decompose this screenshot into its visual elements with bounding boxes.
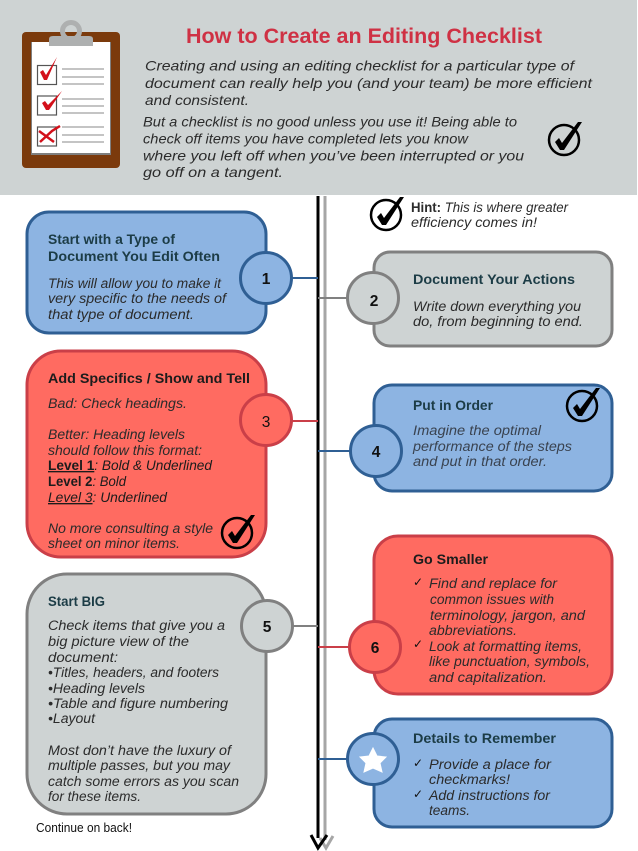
panel: step 4: Put in Order (413, 397, 494, 413)
panel: step 3: Bad: Check headings. (48, 396, 187, 411)
panel: step 6: ✓ (413, 637, 423, 651)
panel: step 3: Level 2: Bold (48, 474, 126, 489)
panel: step 4: performance of the steps (412, 439, 572, 454)
icon: clipboard (22, 22, 120, 168)
panel: step 6: terminology, jargon, and (430, 608, 586, 623)
second paragraph (143, 114, 524, 180)
panel: step 5: Start BIG (48, 593, 105, 609)
panel: step 1: Start with a Type of (48, 231, 175, 247)
panel: step 2: Document Your Actions (413, 271, 575, 287)
panel: step 2: 2 (370, 293, 378, 310)
panel: step 1: very specific to the needs of (48, 291, 227, 306)
panel: step 2: Write down everything you (413, 299, 582, 314)
panel: step 1 (27, 212, 292, 333)
panel: step 5: document: (48, 650, 118, 665)
panel: step 3 (27, 351, 292, 557)
footer note: Continue on back! (36, 821, 132, 835)
panel: step 4: 4 (372, 444, 381, 461)
panel: step 6: ✓ (413, 575, 423, 589)
panel: details to remember: Details to Remember (413, 730, 557, 746)
panel: step 3: Add Specifics / Show and Tell (48, 370, 250, 386)
panel: details to remember (348, 719, 612, 827)
panel: step 3: should follow this format: (48, 443, 202, 458)
second paragraph: where you left off when you’ve been interrupted or you (143, 148, 524, 164)
hint (371, 197, 568, 230)
intro paragraph: and consistent. (145, 92, 249, 108)
panel: step 1: that type of document. (48, 307, 194, 322)
icon: header check (549, 122, 582, 155)
panel: step 5: 5 (263, 619, 272, 636)
panel: step 5: Most don’t have the luxury of (48, 743, 232, 758)
panel: details to remember: ✓ (413, 756, 423, 770)
intro paragraph (145, 58, 593, 108)
panel: step 5: •Titles, headers, and footers (48, 665, 219, 680)
panel: step 5 (27, 574, 292, 814)
panel: step 3: 3 (262, 414, 270, 431)
panel: details to remember: checkmarks! (429, 772, 510, 787)
panel: step 2 (348, 252, 612, 346)
panel: step 2: do, from beginning to end. (413, 314, 583, 329)
panel: step 6: Go Smaller (413, 551, 489, 567)
hint: Hint: This is where greater (411, 200, 568, 215)
timeline lines (311, 196, 333, 848)
panel: step 6: abbreviations. (429, 623, 517, 638)
panel: step 3: Level 3: Underlined (48, 490, 167, 505)
intro paragraph: Creating and using an editing checklist for a particular type of (145, 58, 576, 74)
header band (0, 0, 637, 195)
panel: step 1: This will allow you to make it (48, 276, 222, 291)
panel: step 6: Find and replace for (429, 576, 558, 591)
panel: step 1: 1 (262, 271, 271, 288)
panel: step 6: like punctuation, symbols, (429, 654, 590, 669)
panel: step 5: •Layout (48, 711, 96, 726)
panel: details to remember: ✓ (413, 787, 423, 801)
panel: details to remember: Provide a place for (429, 757, 552, 772)
panel: step 5: •Table and figure numbering (48, 696, 229, 711)
icon: check in step 4 (567, 388, 600, 421)
panel: step 5: big picture view of the (48, 634, 189, 649)
panel: step 4 (350, 385, 612, 491)
panel: step 5: Check items that give you a (48, 618, 226, 633)
panel: step 5: catch some errors as you scan (48, 774, 239, 789)
panel: details to remember: Add instructions for (428, 788, 551, 803)
panel: step 6: common issues with (430, 592, 554, 607)
panel: details to remember: teams. (429, 803, 470, 818)
panel: step 1: Document You Edit Often (48, 248, 220, 264)
second paragraph: But a checklist is no good unless you use it! Being able to (143, 114, 517, 130)
panel: step 6: Look at formatting items, (429, 639, 582, 654)
panel: step 4: and put in that order. (413, 454, 547, 469)
panel: step 4: Imagine the optimal (413, 423, 542, 438)
intro paragraph: document can really help you (and your team) be more efficient (145, 75, 593, 91)
panel: step 5: •Heading levels (48, 681, 145, 696)
panel: step 3: Better: Heading levels (48, 427, 185, 442)
panel: step 6 (350, 536, 612, 694)
second paragraph: go off on a tangent. (143, 164, 283, 180)
second paragraph: check off items you have completed lets you know (143, 130, 469, 146)
icon: check in step 3 (222, 515, 255, 548)
panel: step 3: No more consulting a style (48, 521, 213, 536)
panel: step 3: Level 1: Bold & Underlined (48, 458, 212, 473)
panel: step 6: 6 (371, 640, 380, 657)
panel: step 6: and capitalization. (429, 670, 547, 685)
panel: step 5: multiple passes, but you may (48, 758, 231, 773)
title: How to Create an Editing Checklist (186, 25, 542, 48)
hint: efficiency comes in! (411, 215, 537, 230)
connectors (292, 278, 350, 759)
icon: star (360, 748, 386, 772)
panel: step 5: for these items. (48, 789, 141, 804)
panel: step 3: sheet on minor items. (48, 536, 180, 551)
